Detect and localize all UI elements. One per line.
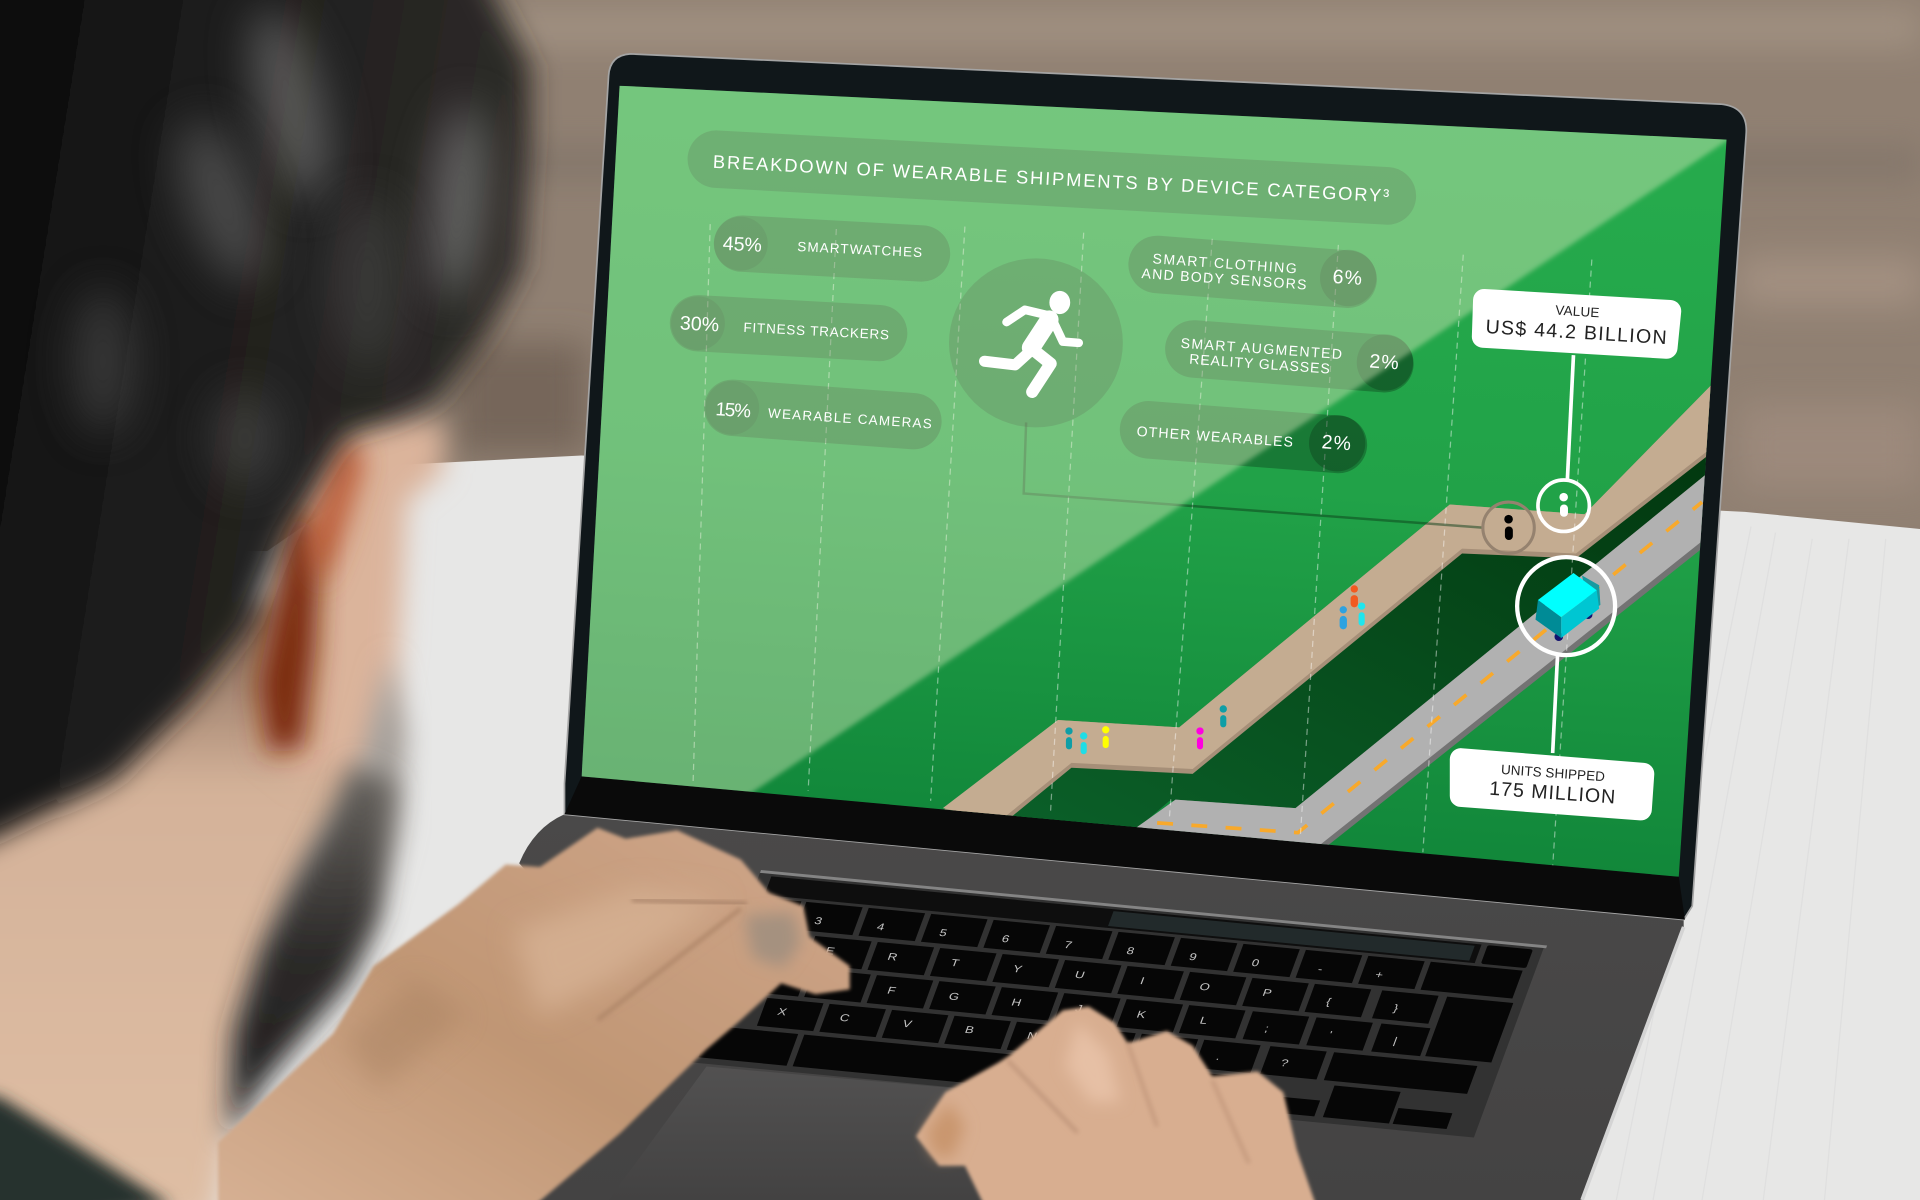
key legends: G xyxy=(947,991,961,1003)
label: 15% wearable cameras: WEARABLE CAMERAS xyxy=(768,406,932,431)
key legends: K xyxy=(1135,1009,1148,1021)
label: smart AR glasses 2%: 2% xyxy=(1369,350,1399,374)
key legends: H xyxy=(1010,997,1023,1009)
key legends: 9 xyxy=(1187,951,1198,963)
label: 45% smartwatches: 45% xyxy=(722,233,762,257)
laptop lid and bezel xyxy=(564,54,1746,920)
label: 30% fitness trackers xyxy=(680,316,888,340)
key legends: 4 xyxy=(875,921,887,933)
white table xyxy=(0,456,1920,1200)
key legends: C xyxy=(838,1012,852,1024)
key legends: U xyxy=(1073,969,1086,981)
key legends: , xyxy=(1153,1043,1161,1054)
label: other wearables 2% xyxy=(1136,423,1352,455)
key legends: 6 xyxy=(1000,933,1011,945)
label: smart AR glasses 2%: SMART AUGMENTED xyxy=(1180,335,1343,362)
key legends: + xyxy=(1373,969,1385,981)
key legends: I xyxy=(1138,976,1146,987)
key legends: { xyxy=(1324,996,1333,1008)
pedestrian figures xyxy=(1065,585,1365,754)
laptop base xyxy=(519,814,1684,1200)
key legends: T xyxy=(949,957,961,969)
beige pedestrian path xyxy=(943,382,1714,823)
key legends: 5 xyxy=(938,927,949,939)
key legends: B xyxy=(963,1024,976,1036)
key legends: O xyxy=(1198,981,1212,993)
key legends: X xyxy=(776,1006,789,1018)
key legends: . xyxy=(1215,1051,1222,1062)
label: 30% fitness trackers: 30% xyxy=(679,312,720,336)
label: 30% fitness trackers: FITNESS TRACKERS xyxy=(743,320,889,342)
key legends: M xyxy=(1087,1036,1102,1048)
dashed vertical grid lines xyxy=(693,224,1592,867)
key legends: 0 xyxy=(1250,957,1261,969)
label: other wearables 2%: OTHER WEARABLES xyxy=(1136,423,1294,450)
person: beard xyxy=(228,655,407,1139)
label: smart AR glasses 2% xyxy=(1181,338,1398,374)
heading pill xyxy=(716,159,1387,196)
key legends: ' xyxy=(1327,1029,1334,1040)
label: 15% wearable cameras xyxy=(716,402,931,428)
connector line: value xyxy=(1567,355,1573,480)
callout: value: US$ 44.2 BILLION xyxy=(1485,316,1667,349)
key legends: R xyxy=(886,951,899,963)
person: neck xyxy=(0,600,380,1200)
key legends: 3 xyxy=(813,915,824,927)
key legends: V xyxy=(901,1018,914,1030)
black figure in circle xyxy=(1483,502,1534,553)
label: smart clothing 6%: 6% xyxy=(1332,266,1363,290)
label: other wearables 2%: 2% xyxy=(1321,431,1352,455)
label: smart clothing 6%: AND BODY SENSORS xyxy=(1141,265,1307,292)
background wall xyxy=(0,0,1920,551)
key legends: } xyxy=(1392,1003,1400,1014)
key legends: E xyxy=(824,945,836,957)
pill: wearable cameras xyxy=(705,381,913,435)
right hand xyxy=(916,1007,1316,1200)
heading text: BREAKDOWN OF WEARABLE SHIPMENTS BY DEVICE CATEGORY³ xyxy=(712,151,1390,206)
label: smart clothing 6% xyxy=(1141,254,1362,290)
screen: green infographic xyxy=(563,73,1745,894)
dark ground between path and road xyxy=(1004,451,1708,833)
callout: units shipped: UNITS SHIPPED xyxy=(1501,762,1606,784)
label: smart AR glasses 2%: REALITY GLASSES xyxy=(1189,351,1330,376)
key legends: F xyxy=(886,985,897,997)
key legends: L xyxy=(1198,1015,1210,1027)
connector line from runner circle to black figure xyxy=(1024,422,1484,528)
keyboard xyxy=(683,871,1547,1138)
person: shirt xyxy=(0,1090,171,1200)
key legends: Y xyxy=(1011,963,1024,975)
centre circle xyxy=(949,258,1123,427)
key legends: ? xyxy=(1279,1057,1290,1069)
callout: value: VALUE xyxy=(1555,303,1600,320)
key legends: 8 xyxy=(1125,945,1137,957)
callout: units shipped xyxy=(1461,759,1643,809)
trackpad xyxy=(609,1067,1308,1200)
label: 45% smartwatches: SMARTWATCHES xyxy=(797,239,922,260)
pill: smart clothing xyxy=(1157,250,1376,306)
pill: fitness trackers xyxy=(671,296,879,350)
left hand xyxy=(218,828,850,1200)
key legends: J xyxy=(1074,1003,1084,1015)
person: face side and ear xyxy=(257,416,443,784)
callout: value xyxy=(1483,300,1670,349)
label: 45% smartwatches xyxy=(723,236,922,257)
key legends xyxy=(775,915,1422,1078)
pill: other wearables xyxy=(1149,415,1365,471)
key legends: P xyxy=(1261,987,1274,999)
callout: units shipped: 175 MILLION xyxy=(1489,778,1616,808)
label: 15% wearable cameras: 15% xyxy=(715,399,752,423)
truck circle xyxy=(1517,557,1615,655)
person group clipped to canvas xyxy=(0,0,530,1200)
person: hair xyxy=(0,0,530,857)
key legends: 7 xyxy=(1062,939,1074,951)
screen glare xyxy=(576,73,1745,796)
truck xyxy=(1536,573,1600,641)
icon: running person xyxy=(984,291,1079,392)
label: smart clothing 6%: SMART CLOTHING xyxy=(1152,250,1297,276)
key legends: - xyxy=(1316,964,1325,975)
white figure in circle xyxy=(1538,480,1589,531)
connector line: units shipped xyxy=(1553,655,1558,753)
key legends: | xyxy=(1392,1036,1399,1047)
grey road xyxy=(1133,473,1708,850)
pill: smart AR glasses xyxy=(1194,334,1413,391)
key legends: N xyxy=(1025,1030,1039,1042)
pill: smartwatches xyxy=(714,217,922,271)
key legends: ; xyxy=(1263,1023,1270,1034)
